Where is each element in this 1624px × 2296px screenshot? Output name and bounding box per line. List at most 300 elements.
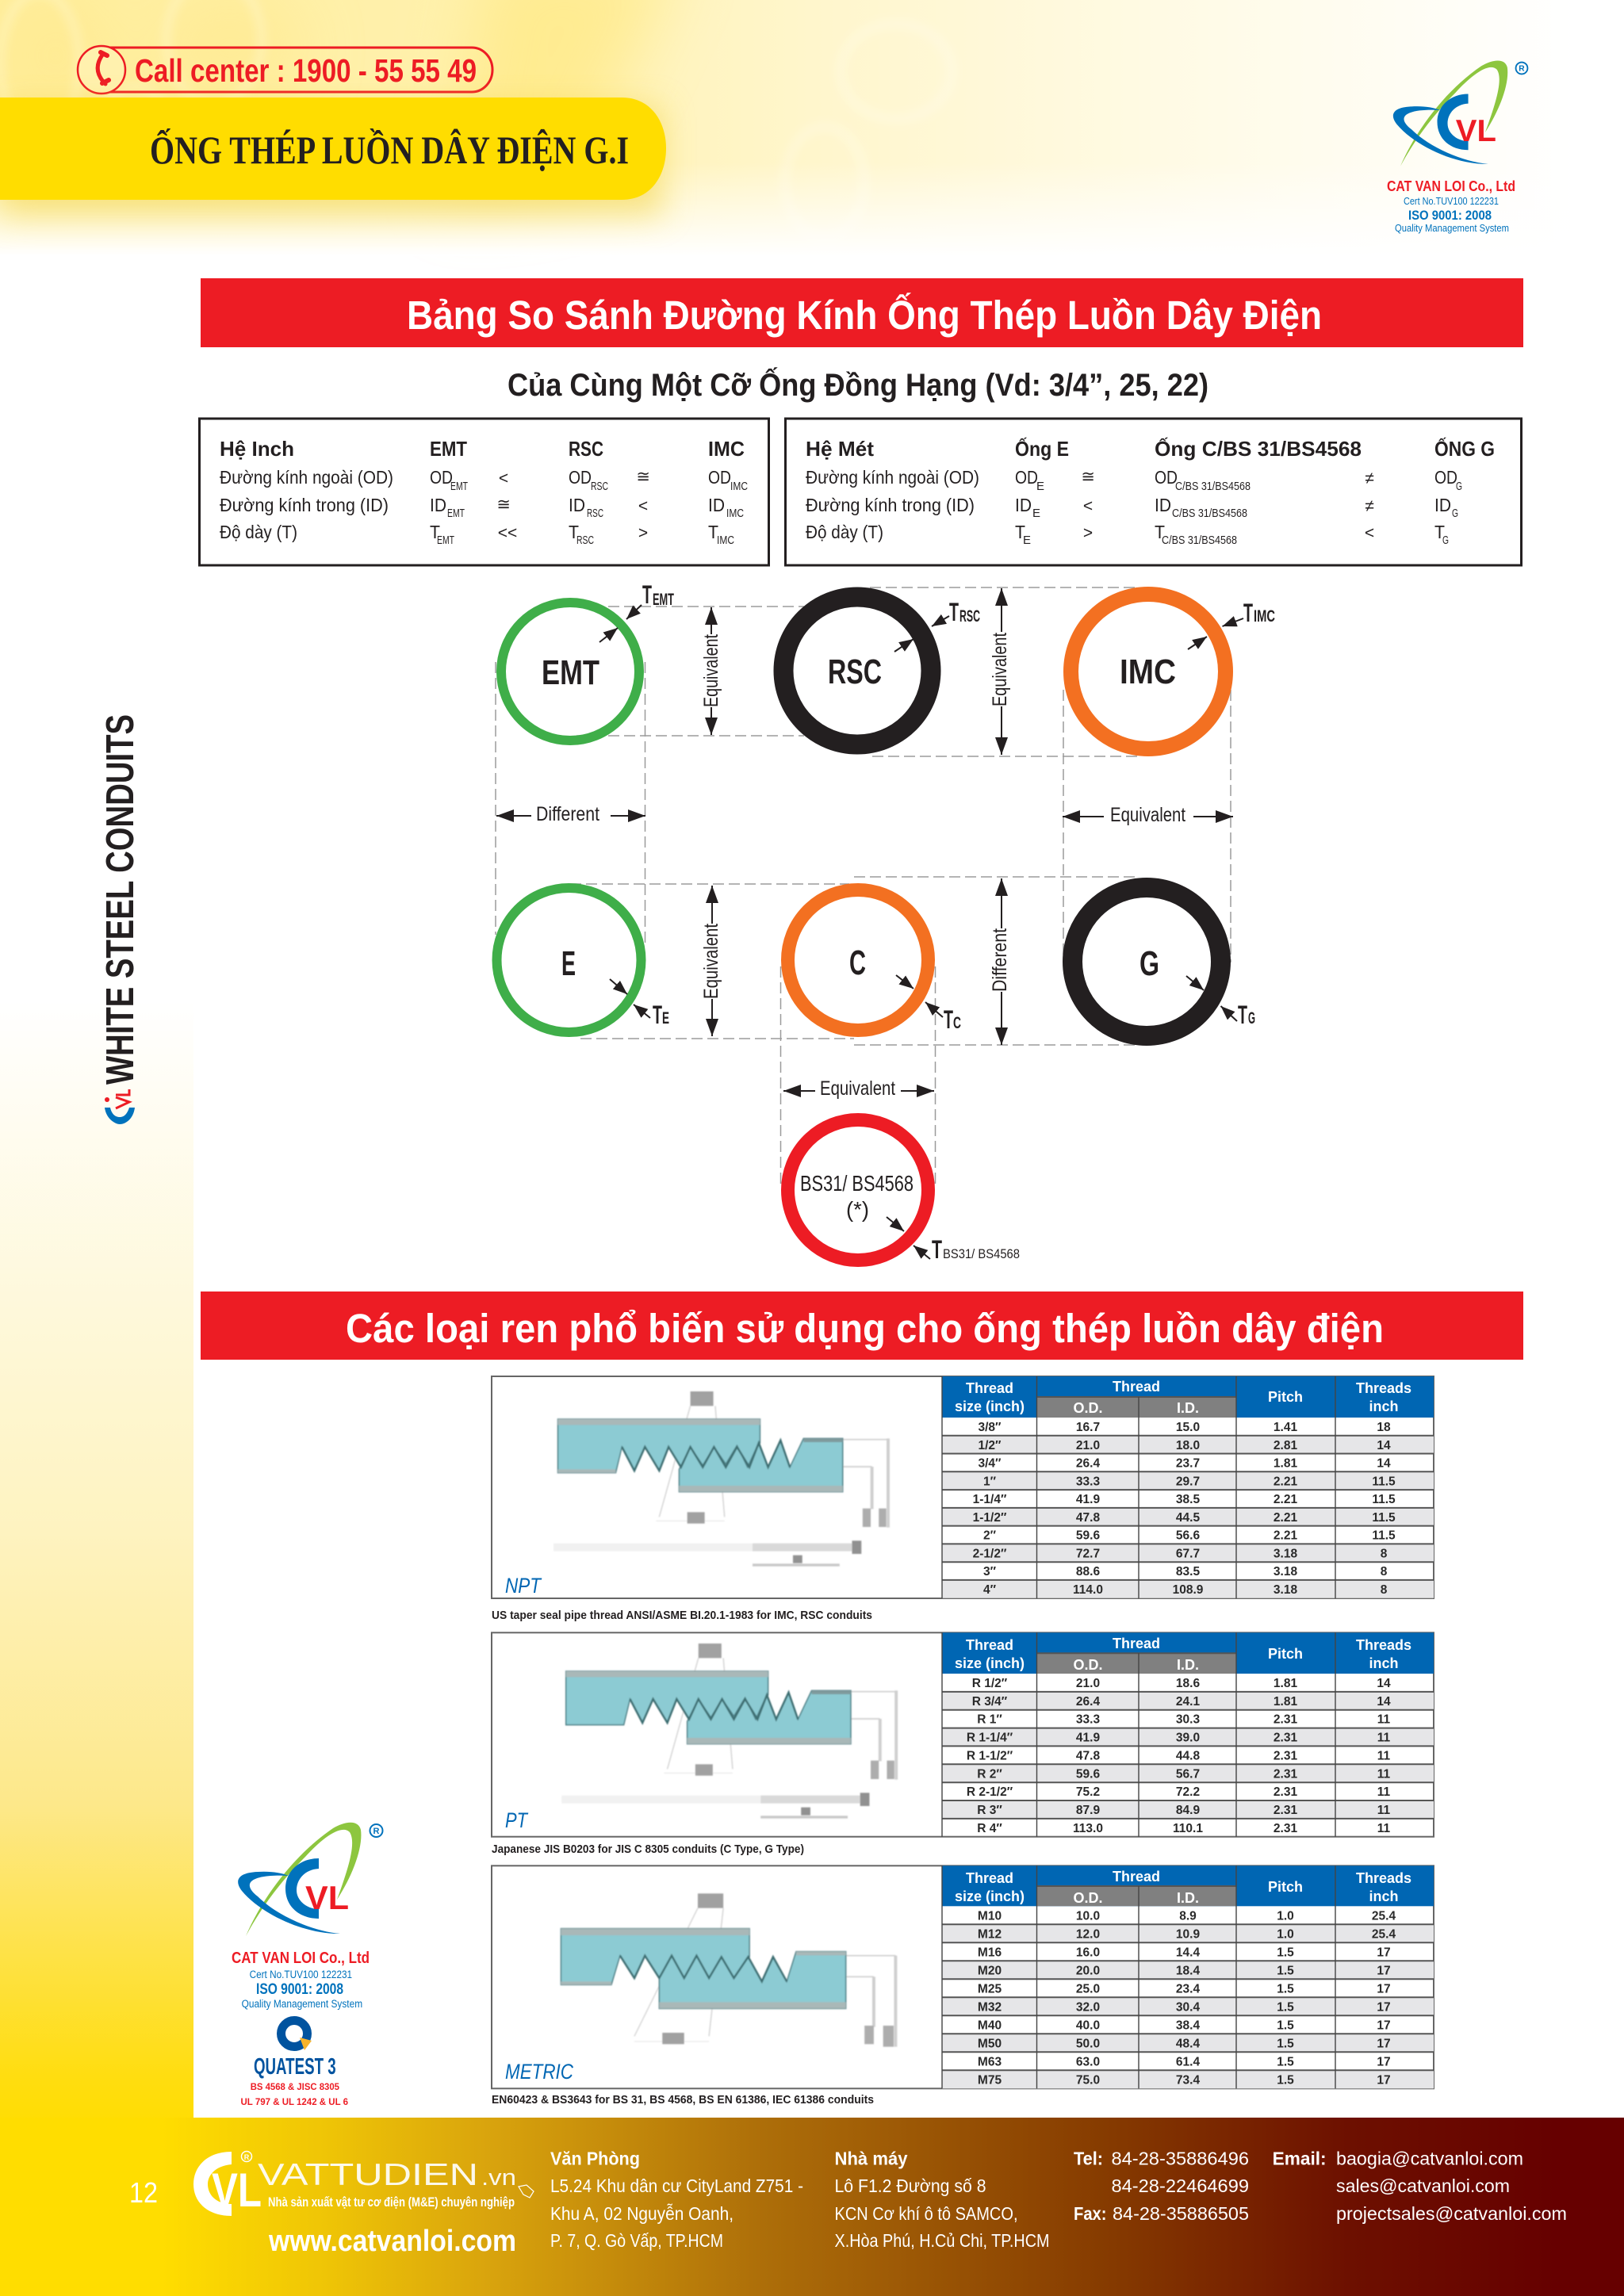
icon: small CVL logo <box>105 1089 135 1124</box>
table: PT: 2.31 <box>1274 1822 1297 1835</box>
footer brand: vattudien: Nhà sản xuất vật tư cơ điện (M&E) chuyên nghiệp <box>268 2195 515 2210</box>
table: METRIC: 17 <box>1377 2000 1391 2014</box>
table: NPT: Thread <box>1113 1379 1160 1395</box>
table: PT: R 2″ <box>977 1767 1002 1781</box>
ring: EMT <box>501 580 674 740</box>
table: PT: 24.1 <box>1176 1695 1200 1709</box>
table: METRIC: M16 <box>978 1946 1002 1959</box>
table: PT: 14 <box>1377 1677 1391 1690</box>
panel: inch system comparison: ID <box>569 495 585 515</box>
footer: factory address: X.Hòa Phú, H.Củ Chi, TP.HCM <box>834 2230 1050 2251</box>
table: METRIC: 1.5 <box>1277 2073 1294 2087</box>
table: PT: 21.0 <box>1076 1677 1100 1690</box>
table: PT: R 3″ <box>977 1804 1002 1817</box>
table: METRIC: 73.4 <box>1176 2073 1200 2087</box>
footer: email: sales@catvanloi.com <box>1336 2175 1510 2196</box>
table: METRIC: I.D. <box>1177 1890 1199 1906</box>
footer brand: vattudien: .vn <box>481 2165 516 2191</box>
table: NPT: 1.81 <box>1274 1457 1297 1470</box>
ring: C: T <box>944 1005 953 1034</box>
table: NPT: 3″ <box>983 1565 997 1578</box>
table: METRIC: 48.4 <box>1176 2037 1200 2050</box>
table: METRIC: M25 <box>978 1982 1002 1996</box>
footer: phone and fax: 84-28-22464699 <box>1112 2175 1249 2196</box>
table: METRIC: 30.4 <box>1176 2000 1200 2014</box>
logo: top right CVL: Quality Management System <box>1395 222 1509 234</box>
panel: inch system comparison: < <box>638 497 648 515</box>
table: NPT: 26.4 <box>1076 1457 1100 1470</box>
panel: metric system comparison: C/BS 31/BS4568 <box>1175 480 1251 493</box>
panel: metric system comparison: Ống E <box>1015 437 1069 461</box>
panel: metric system comparison: G <box>1456 480 1462 493</box>
thread drawing: PT <box>561 1644 898 1819</box>
table: PT: 110.1 <box>1173 1822 1203 1835</box>
table: PT: Thread <box>1113 1636 1160 1651</box>
footer brand: vattudien: R <box>244 2153 250 2161</box>
logo: left CVL with certifications: CAT VAN LOI Co., Ltd <box>232 1950 370 1967</box>
yellow title tab <box>0 98 666 216</box>
table: PT: R 1″ <box>977 1713 1002 1727</box>
panel: inch system comparison: ID <box>708 495 725 515</box>
table: METRIC: M63 <box>978 2055 1002 2068</box>
table: METRIC: 16.0 <box>1076 1946 1100 1959</box>
table: NPT: 33.3 <box>1076 1475 1100 1488</box>
panel: inch system comparison: T <box>430 522 440 542</box>
ring: IMC: T <box>1243 599 1253 627</box>
arrow: equivalent RSC IMC: Equivalent <box>989 633 1011 706</box>
table: NPT: 11.5 <box>1372 1529 1396 1543</box>
thread drawing: METRIC <box>561 1893 895 2047</box>
caption: METRIC: EN60423 & BS3643 for BS 31, BS 4568, BS EN 61386, IEC 61386 conduits <box>492 2093 874 2107</box>
ring: EMT: EMT <box>653 591 674 609</box>
table: PT: 47.8 <box>1076 1749 1100 1762</box>
table: NPT: 23.7 <box>1176 1457 1200 1470</box>
icon: hand cursor <box>519 2185 534 2198</box>
ring: RSC: RSC <box>959 607 980 626</box>
table: METRIC: 1.5 <box>1277 1946 1294 1959</box>
icon: CVL mark <box>238 1823 382 1936</box>
panel: inch system comparison: EMT <box>430 437 467 461</box>
table: NPT: 72.7 <box>1076 1547 1100 1560</box>
table: PT: 11 <box>1377 1767 1391 1781</box>
table: METRIC: 12.0 <box>1076 1927 1100 1941</box>
table: METRIC: 17 <box>1377 2037 1391 2050</box>
logo: left CVL with certifications <box>232 1823 382 2107</box>
logo: left CVL with certifications: UL 797 & UL 1242 & UL 6 <box>241 2096 348 2107</box>
table: NPT: 29.7 <box>1176 1475 1200 1488</box>
panel: METRIC thread <box>492 1866 1434 2088</box>
icon: Quatest 3 <box>281 2020 312 2050</box>
table: PT: 72.2 <box>1176 1785 1200 1799</box>
table: METRIC: M20 <box>978 1964 1002 1977</box>
ring: C <box>788 890 961 1034</box>
ring: IMC: IMC <box>1120 652 1176 691</box>
call center pill <box>78 46 492 94</box>
table: PT: 30.3 <box>1176 1713 1200 1727</box>
table: NPT: O.D. <box>1073 1400 1103 1416</box>
table: NPT: 15.0 <box>1176 1421 1200 1434</box>
table: METRIC: 10.9 <box>1176 1927 1200 1941</box>
panel: metric system comparison: OD <box>1155 467 1178 488</box>
panel: metric system comparison <box>785 419 1521 565</box>
logo: top right CVL <box>1387 60 1527 234</box>
table: METRIC: 75.0 <box>1076 2073 1100 2087</box>
icon: CVL mark: VL <box>305 1879 349 1916</box>
footer: factory address: Nhà máy <box>834 2149 908 2169</box>
logo: top right CVL: Cert No.TUV100 122231 <box>1404 195 1499 207</box>
ring: C: C <box>953 1014 961 1032</box>
table: NPT: 14 <box>1377 1457 1391 1470</box>
table: NPT: 59.6 <box>1076 1529 1100 1543</box>
footer: phone and fax: 84-28-35886496 <box>1112 2149 1249 2169</box>
table: NPT: 114.0 <box>1073 1583 1103 1597</box>
table: PT: 2.31 <box>1274 1732 1297 1745</box>
table: PT: 11 <box>1377 1732 1391 1745</box>
panel: metric system comparison: Đường kính trong (ID) <box>806 495 975 515</box>
background: top yellow texture <box>0 0 1624 256</box>
panel: inch system comparison: Đường kính trong (ID) <box>220 495 389 515</box>
panel: inch system comparison: RSC <box>569 437 603 461</box>
table: METRIC: 25.0 <box>1076 1982 1100 1996</box>
table: METRIC: 32.0 <box>1076 2000 1100 2014</box>
table: PT: 2.31 <box>1274 1749 1297 1762</box>
table: METRIC: 25.4 <box>1372 1909 1396 1923</box>
panel: metric system comparison: < <box>1083 497 1093 515</box>
thread drawing: NPT <box>553 1391 890 1567</box>
table: METRIC: 18.4 <box>1176 1964 1200 1977</box>
panel: metric system comparison: ID <box>1015 495 1032 515</box>
table: METRIC: M75 <box>978 2073 1002 2087</box>
panel: inch system comparison: RSC <box>591 480 608 493</box>
panel: inch system comparison: IMC <box>717 534 734 547</box>
ring: BS31 / BS4568: BS31/ BS4568 <box>800 1171 914 1196</box>
panel: inch system comparison: OD <box>569 467 592 488</box>
panel: inch system comparison: RSC <box>587 507 603 520</box>
panel: inch system comparison: OD <box>430 467 453 488</box>
diagram: conduit size comparison <box>496 580 1275 1264</box>
table: NPT: 18 <box>1377 1421 1391 1434</box>
table: NPT: 1″ <box>983 1475 997 1488</box>
table: NPT: 44.5 <box>1176 1511 1200 1525</box>
table: NPT: 2-1/2″ <box>973 1547 1007 1560</box>
panel: inch system comparison: T <box>708 522 718 542</box>
footer: office address: L5.24 Khu dân cư CityLand Z751 - <box>550 2175 803 2196</box>
page number: 12 <box>129 2176 158 2209</box>
table: NPT: 8 <box>1381 1583 1388 1597</box>
table: METRIC: 1.0 <box>1277 1909 1294 1923</box>
panel: inch system comparison: RSC <box>576 534 594 547</box>
logo: left CVL with certifications: BS 4568 & JISC 8305 <box>251 2081 339 2092</box>
table: METRIC: size (inch) <box>955 1888 1025 1904</box>
table: PT: R 1-1/2″ <box>967 1749 1013 1762</box>
table: PT: 84.9 <box>1176 1804 1200 1817</box>
panel: inch system comparison: Hệ Inch <box>220 437 294 461</box>
table: METRIC: 1.5 <box>1277 2055 1294 2068</box>
label: METRIC: METRIC <box>505 2060 573 2084</box>
table: METRIC: 1.5 <box>1277 1982 1294 1996</box>
table: METRIC: 17 <box>1377 2055 1391 2068</box>
table: METRIC: Threads <box>1356 1870 1411 1886</box>
table: NPT: size (inch) <box>955 1399 1025 1414</box>
table: METRIC: 38.4 <box>1176 2019 1200 2032</box>
panel: inch system comparison: IMC <box>708 437 745 461</box>
ring: BS31 / BS4568: BS31/ BS4568 <box>943 1246 1020 1261</box>
arrow: equivalent C BS: Equivalent <box>820 1077 895 1100</box>
logo: left CVL with certifications: ISO 9001: 2008 <box>256 1981 343 1998</box>
panel: metric system comparison: < <box>1365 524 1374 542</box>
table: PT: I.D. <box>1177 1657 1199 1673</box>
background: left strip gradient <box>0 1001 193 2133</box>
panel: metric system comparison: Độ dày (T) <box>806 522 883 542</box>
panel: metric system comparison: ỐNG G <box>1434 437 1495 461</box>
table: METRIC: 63.0 <box>1076 2055 1100 2068</box>
footer: phone and fax <box>1074 2149 1249 2224</box>
footer brand: vattudien: VL <box>212 2164 262 2217</box>
table: METRIC: 17 <box>1377 1964 1391 1977</box>
logo: top right CVL: ISO 9001: 2008 <box>1408 208 1492 223</box>
ring: E: E <box>561 944 576 983</box>
table: METRIC: O.D. <box>1073 1890 1103 1906</box>
footer: office address <box>550 2149 803 2251</box>
ring: E: E <box>662 1009 669 1027</box>
table: METRIC: 20.0 <box>1076 1964 1100 1977</box>
table: METRIC: 50.0 <box>1076 2037 1100 2050</box>
icon: CVL mark: R <box>373 1827 380 1836</box>
logo: left CVL with certifications: Cert No.TUV100 122231 <box>250 1969 352 1980</box>
table: PT: 75.2 <box>1076 1785 1100 1799</box>
table: PT: 2.31 <box>1274 1713 1297 1727</box>
table: PT: size (inch) <box>955 1655 1025 1671</box>
table: PT: 39.0 <box>1176 1732 1200 1745</box>
panel: inch system comparison: EMT <box>447 507 465 520</box>
heading banner: thread types <box>201 1292 1523 1360</box>
table: METRIC: 10.0 <box>1076 1909 1100 1923</box>
table: NPT: 2.81 <box>1274 1439 1297 1452</box>
panel: inch system comparison: T <box>569 522 579 542</box>
table: NPT: 1-1/4″ <box>973 1493 1007 1506</box>
ring: G: T <box>1238 1001 1247 1029</box>
footer: factory address: Lô F1.2 Đường số 8 <box>834 2175 986 2196</box>
table: NPT: 3/8″ <box>979 1421 1002 1434</box>
footer: phone and fax: Fax: <box>1074 2203 1107 2224</box>
table: PT: 2.31 <box>1274 1785 1297 1799</box>
table: NPT: 2.21 <box>1274 1475 1297 1488</box>
table: METRIC: 1.5 <box>1277 2019 1294 2032</box>
table: NPT: 14 <box>1377 1439 1391 1452</box>
table: NPT: inch <box>1369 1399 1399 1414</box>
ring: IMC: IMC <box>1254 607 1275 626</box>
table: PT: 2.31 <box>1274 1767 1297 1781</box>
table: NPT: 3.18 <box>1274 1565 1297 1578</box>
table: METRIC: inch <box>1369 1888 1399 1904</box>
panel: metric system comparison: OD <box>1434 467 1457 488</box>
panel: metric system comparison: E <box>1023 534 1031 547</box>
table: METRIC: 1.0 <box>1277 1927 1294 1941</box>
ring: G: G <box>1139 944 1159 983</box>
ring: BS31 / BS4568: (*) <box>846 1197 869 1222</box>
table: METRIC: 25.4 <box>1372 1927 1396 1941</box>
table: PT: 87.9 <box>1076 1804 1100 1817</box>
table: PT: 11 <box>1377 1804 1391 1817</box>
table: NPT: 16.7 <box>1076 1421 1100 1434</box>
footer: office address: P. 7, Q. Gò Vấp, TP.HCM <box>550 2230 723 2251</box>
footer brand: vattudien <box>193 2152 534 2258</box>
panel: metric system comparison: Ống C/BS 31/BS4568 <box>1155 437 1362 461</box>
footer: email: Email: <box>1273 2149 1327 2169</box>
table: PT: R 1/2″ <box>972 1677 1008 1690</box>
panel: metric system comparison: T <box>1434 522 1445 542</box>
logo: left CVL with certifications: Quality Management System <box>242 1998 362 2010</box>
table: PT: 2.31 <box>1274 1804 1297 1817</box>
table: METRIC: M10 <box>978 1909 1002 1923</box>
caption: PT: Japanese JIS B0203 for JIS C 8305 conduits (C Type, G Type) <box>492 1843 804 1856</box>
table: NPT: Threads <box>1356 1380 1411 1396</box>
table: NPT: 1-1/2″ <box>973 1511 1007 1525</box>
arrow: equivalent IMC G: Equivalent <box>1110 804 1185 826</box>
panel: inch system comparison: EMT <box>450 480 468 493</box>
ring: RSC <box>783 597 980 744</box>
table: PT: R 3/4″ <box>972 1695 1008 1709</box>
table: PT: Thread <box>966 1637 1013 1653</box>
arrow: equivalent E C: Equivalent <box>700 924 722 999</box>
footer: email: baogia@catvanloi.com <box>1336 2149 1523 2169</box>
table: METRIC: 40.0 <box>1076 2019 1100 2032</box>
table: PT: 26.4 <box>1076 1695 1100 1709</box>
panel: PT thread <box>492 1632 1434 1837</box>
table: NPT: 2.21 <box>1274 1511 1297 1525</box>
table: METRIC: M50 <box>978 2037 1002 2050</box>
panel: inch system comparison <box>200 419 769 565</box>
table: PT: 59.6 <box>1076 1767 1100 1781</box>
table: NPT: 4″ <box>983 1583 997 1597</box>
panel: metric system comparison: C/BS 31/BS4568 <box>1172 507 1247 520</box>
table: NPT: 67.7 <box>1176 1547 1200 1560</box>
table: PT: 14 <box>1377 1695 1391 1709</box>
panel: inch system comparison: > <box>638 524 648 542</box>
panel: metric system comparison: E <box>1032 507 1040 520</box>
table: PT: Pitch <box>1268 1646 1303 1662</box>
table: METRIC: M40 <box>978 2019 1002 2032</box>
ring: BS31 / BS4568: T <box>932 1235 942 1264</box>
footer: phone and fax: Tel: <box>1074 2149 1103 2169</box>
panel: inch system comparison: IMC <box>726 507 744 520</box>
heading banner: comparison <box>201 278 1523 347</box>
panel: inch system comparison: ≅ <box>496 496 511 514</box>
ring: EMT: EMT <box>542 653 599 692</box>
table: NPT: I.D. <box>1177 1400 1199 1416</box>
heading banner: comparison: Bảng So Sánh Đường Kính Ống Thép Luồn Dây Điện <box>407 292 1322 338</box>
table: METRIC: 17 <box>1377 2019 1391 2032</box>
panel: metric system comparison: ID <box>1434 495 1451 515</box>
table: METRIC: 61.4 <box>1176 2055 1200 2068</box>
panel: NPT thread <box>492 1376 1434 1598</box>
ring: BS31 / BS4568 <box>788 1119 1020 1264</box>
table: METRIC: 23.4 <box>1176 1982 1200 1996</box>
table: METRIC <box>942 1866 1434 2088</box>
table: NPT: 3.18 <box>1274 1547 1297 1560</box>
panel: metric system comparison: ≅ <box>1081 468 1095 486</box>
table: NPT: 3.18 <box>1274 1583 1297 1597</box>
table: METRIC: 8.9 <box>1179 1909 1197 1923</box>
table: METRIC: 1.5 <box>1277 1964 1294 1977</box>
caption: NPT: US taper seal pipe thread ANSI/ASME BI.20.1-1983 for IMC, RSC conduits <box>492 1609 872 1622</box>
panel: metric system comparison: T <box>1015 522 1025 542</box>
footer brand: vattudien: www.catvanloi.com <box>268 2225 516 2258</box>
table: METRIC: 1.5 <box>1277 2037 1294 2050</box>
panel: metric system comparison: T <box>1155 522 1165 542</box>
panel: inch system comparison: EMT <box>437 534 454 547</box>
logo: top right CVL: VL <box>1456 114 1496 148</box>
table: PT: R 2-1/2″ <box>967 1785 1013 1799</box>
table: NPT: 11.5 <box>1372 1493 1396 1506</box>
footer: factory address <box>834 2149 1050 2251</box>
table: METRIC: Pitch <box>1268 1879 1303 1895</box>
table: PT: 41.9 <box>1076 1732 1100 1745</box>
table: NPT: 41.9 <box>1076 1493 1100 1506</box>
table: METRIC: 17 <box>1377 2073 1391 2087</box>
panel: metric system comparison: ≠ <box>1365 497 1374 515</box>
subtitle: Của Cùng Một Cỡ Ống Đồng Hạng (Vd: 3/4”, 25, 22) <box>508 366 1208 403</box>
arrow: different C G: Different <box>989 928 1011 992</box>
table: NPT: 1/2″ <box>979 1439 1002 1452</box>
footer: factory address: KCN Cơ khí ô tô SAMCO, <box>834 2203 1018 2224</box>
logo: top right CVL: R <box>1519 65 1525 74</box>
label: NPT: NPT <box>505 1574 542 1598</box>
table: PT <box>942 1632 1434 1837</box>
panel: metric system comparison: E <box>1036 480 1044 493</box>
table: NPT: 3/4″ <box>979 1457 1002 1470</box>
label: PT: PT <box>505 1808 529 1832</box>
table: METRIC: 17 <box>1377 1946 1391 1959</box>
panel: inch system comparison: Độ dày (T) <box>220 522 297 542</box>
table: PT: R 1-1/4″ <box>967 1732 1013 1745</box>
footer: phone and fax: 84-28-35886505 <box>1113 2203 1249 2224</box>
logo: left CVL with certifications: QUATEST 3 <box>254 2054 336 2080</box>
table: METRIC: M32 <box>978 2000 1002 2014</box>
table: NPT: 108.9 <box>1173 1583 1204 1597</box>
table: PT: inch <box>1369 1655 1399 1671</box>
ring: EMT: T <box>642 580 652 609</box>
table: NPT: 83.5 <box>1176 1565 1200 1578</box>
arrow: different EMT E: Different <box>536 803 599 825</box>
ring: C: C <box>849 943 866 982</box>
table: PT: 33.3 <box>1076 1713 1100 1727</box>
table: NPT <box>942 1376 1434 1598</box>
arrow: equivalent EMT RSC: Equivalent <box>700 634 722 707</box>
panel: inch system comparison: ≅ <box>636 468 650 486</box>
table: METRIC: Thread <box>1113 1869 1160 1885</box>
table: METRIC: Thread <box>966 1870 1013 1886</box>
panel: metric system comparison: G <box>1442 534 1449 547</box>
ring: G: G <box>1248 1009 1255 1027</box>
table: NPT: 18.0 <box>1176 1439 1200 1452</box>
table: PT: Threads <box>1356 1637 1411 1653</box>
table: PT: 113.0 <box>1073 1822 1103 1835</box>
icon: phone <box>78 46 125 94</box>
panel: metric system comparison: ≠ <box>1365 469 1374 488</box>
panel: inch system comparison: << <box>498 524 517 542</box>
table: NPT: 21.0 <box>1076 1439 1100 1452</box>
panel: inch system comparison: Đường kính ngoài (OD) <box>220 467 393 488</box>
table: NPT: 56.6 <box>1176 1529 1200 1543</box>
ring: IMC <box>1071 595 1275 748</box>
table: PT: 1.81 <box>1274 1677 1297 1690</box>
ring: RSC: T <box>949 598 959 626</box>
logo: top right CVL: CAT VAN LOI Co., Ltd <box>1387 178 1515 194</box>
table: PT: O.D. <box>1073 1657 1103 1673</box>
call center pill: Call center : 1900 - 55 55 49 <box>135 52 477 89</box>
table: NPT: 1.41 <box>1274 1421 1297 1434</box>
